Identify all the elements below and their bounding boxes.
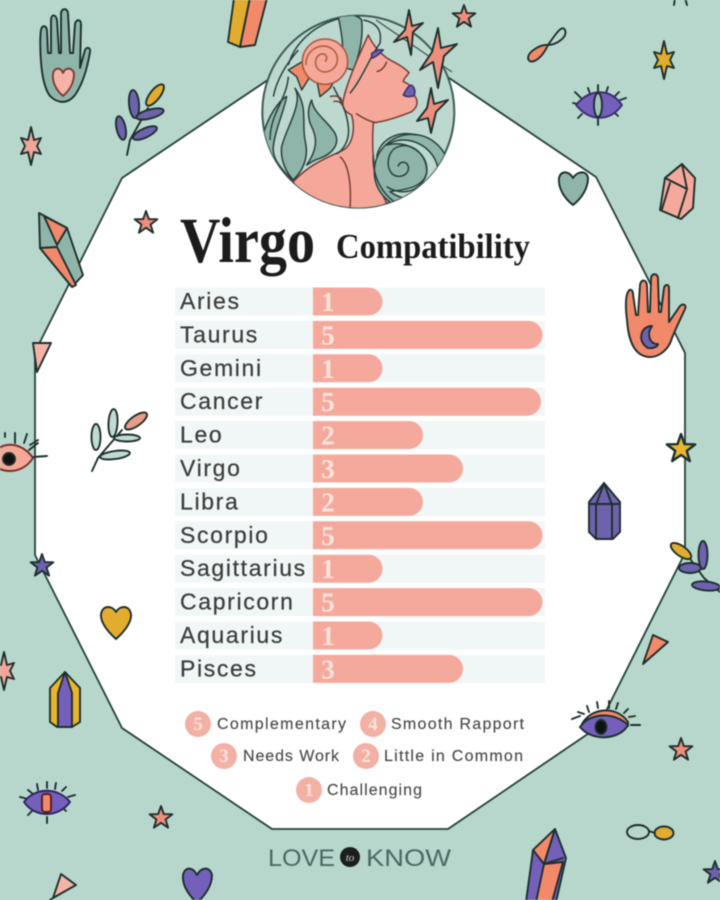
legend item: 5 Complementary: Complementary bbox=[217, 716, 346, 733]
icon: purple crystal bbox=[589, 483, 620, 539]
icon: teal leaf sprig bbox=[92, 409, 150, 471]
icon: gold sparkle bbox=[654, 41, 674, 79]
title: Virgo bbox=[180, 205, 315, 277]
legend item: 1 Challenging: Challenging bbox=[327, 782, 422, 799]
icon: purple star left bbox=[31, 554, 53, 576]
logo: LoveToKnow: KNOW bbox=[366, 845, 452, 872]
row: Pisces: Pisces bbox=[180, 655, 258, 681]
row: Aquarius bbox=[175, 621, 545, 651]
row: Libra bbox=[175, 487, 545, 517]
icon: teal and orange crystal bbox=[39, 213, 83, 287]
legend bbox=[185, 711, 525, 803]
legend item: 1 Challenging bbox=[296, 777, 422, 803]
icon: portrait sparkle stars bbox=[394, 10, 457, 133]
row: Libra: Libra bbox=[180, 488, 239, 514]
legend item: 4 Smooth Rapport: 4 bbox=[368, 714, 378, 735]
legend item: 5 Complementary bbox=[185, 711, 346, 737]
legend item: 3 Needs Work: Needs Work bbox=[243, 748, 340, 765]
row: Leo: Leo bbox=[180, 422, 223, 448]
title: Compatibility bbox=[336, 227, 530, 266]
row: Pisces bbox=[175, 654, 545, 684]
icon: green hand with heart bbox=[40, 9, 90, 102]
icon: purple star right edge bbox=[704, 861, 720, 883]
legend item: 4 Smooth Rapport: Smooth Rapport bbox=[391, 716, 525, 733]
icon: pink triangle left bbox=[33, 343, 51, 372]
icon: purple heart bbox=[183, 869, 212, 900]
row: Aries: Aries bbox=[180, 288, 241, 314]
row: Virgo: Virgo bbox=[180, 455, 242, 481]
icon: salmon star lower right bbox=[670, 738, 692, 760]
icon: orange hand with moon bbox=[626, 274, 686, 357]
row: Capricorn: Capricorn bbox=[180, 589, 295, 615]
row: Virgo bbox=[175, 454, 545, 484]
icon: purple and orange crystal bbox=[526, 829, 566, 900]
icon: purple eye on panel edge bbox=[572, 701, 640, 737]
icon: yellow and purple crystal bbox=[50, 672, 80, 727]
row: Gemini: Gemini bbox=[180, 355, 263, 381]
row: Aries: 1 bbox=[321, 287, 335, 317]
logo: LoveToKnow bbox=[268, 845, 452, 872]
icon: salmon triangle bbox=[643, 635, 668, 664]
icon: gold star bbox=[667, 434, 695, 461]
row: Leo bbox=[175, 421, 545, 451]
icon: pink eye left edge bbox=[0, 433, 47, 471]
icon: gold heart bbox=[101, 607, 131, 639]
row: Taurus: Taurus bbox=[180, 321, 259, 347]
row: Scorpio bbox=[175, 521, 545, 551]
row: Leo: 2 bbox=[321, 421, 335, 451]
logo: LoveToKnow: LOVE bbox=[268, 845, 335, 872]
icon: salmon star bbox=[135, 211, 157, 233]
row: Virgo: 3 bbox=[321, 454, 335, 484]
icon: purple eye upper right bbox=[573, 85, 626, 125]
icon: pink sparkle left edge bbox=[0, 652, 14, 690]
icon: small mark at top edge bbox=[674, 0, 687, 5]
icon: yellow and purple leaf sprig bbox=[668, 540, 720, 592]
panel edge line over portrait bbox=[376, 20, 452, 72]
legend item: 2 Little in Common: Little in Common bbox=[384, 748, 523, 765]
icon: purple leaf sprig bbox=[114, 82, 167, 155]
row: Cancer bbox=[175, 387, 545, 417]
row: Pisces: 3 bbox=[321, 654, 335, 684]
icon: pink crystal bbox=[660, 164, 695, 219]
row: Taurus bbox=[175, 320, 545, 350]
icon: yellow and orange crystal bbox=[228, 0, 267, 47]
icon: pink sparkle bbox=[21, 127, 41, 165]
icon: teal heart on panel edge bbox=[559, 172, 588, 205]
row: Sagittarius: 1 bbox=[321, 554, 335, 584]
icon: salmon infinity bbox=[528, 28, 565, 62]
legend item: 4 Smooth Rapport bbox=[360, 711, 525, 737]
legend item: 3 Needs Work: 3 bbox=[219, 746, 229, 767]
legend item: 1 Challenging: 1 bbox=[304, 780, 314, 801]
row: Capricorn bbox=[175, 588, 545, 618]
row: Sagittarius: Sagittarius bbox=[180, 555, 307, 581]
icon: yellow infinity bbox=[627, 825, 674, 840]
row: Scorpio: 5 bbox=[321, 521, 335, 551]
row: Libra: 2 bbox=[321, 487, 335, 517]
row: Gemini bbox=[175, 354, 545, 384]
title bbox=[180, 205, 530, 277]
legend item: 2 Little in Common bbox=[353, 743, 523, 769]
row: Aquarius: Aquarius bbox=[180, 622, 284, 648]
row: Sagittarius bbox=[175, 554, 545, 584]
row: Capricorn: 5 bbox=[321, 588, 335, 618]
row: Scorpio: Scorpio bbox=[180, 522, 270, 548]
logo: LoveToKnow: to bbox=[346, 852, 355, 864]
icon: pink triangle bottom bbox=[47, 874, 76, 900]
row: Taurus: 5 bbox=[321, 320, 335, 350]
icon: salmon star bottom bbox=[150, 806, 172, 828]
row: Gemini: 1 bbox=[321, 354, 335, 384]
row: Aquarius: 1 bbox=[321, 621, 335, 651]
compatibility bar chart bbox=[175, 287, 545, 684]
row: Aries bbox=[175, 287, 545, 317]
row: Cancer: Cancer bbox=[180, 388, 264, 414]
portrait: Virgo woman in profile bbox=[262, 14, 454, 217]
legend item: 3 Needs Work bbox=[211, 743, 340, 769]
legend item: 2 Little in Common: 2 bbox=[361, 746, 371, 767]
icon: small top star bbox=[453, 5, 475, 27]
icon: purple eye lower left bbox=[20, 782, 75, 823]
legend item: 5 Complementary: 5 bbox=[193, 714, 203, 735]
row: Cancer: 5 bbox=[321, 387, 335, 417]
